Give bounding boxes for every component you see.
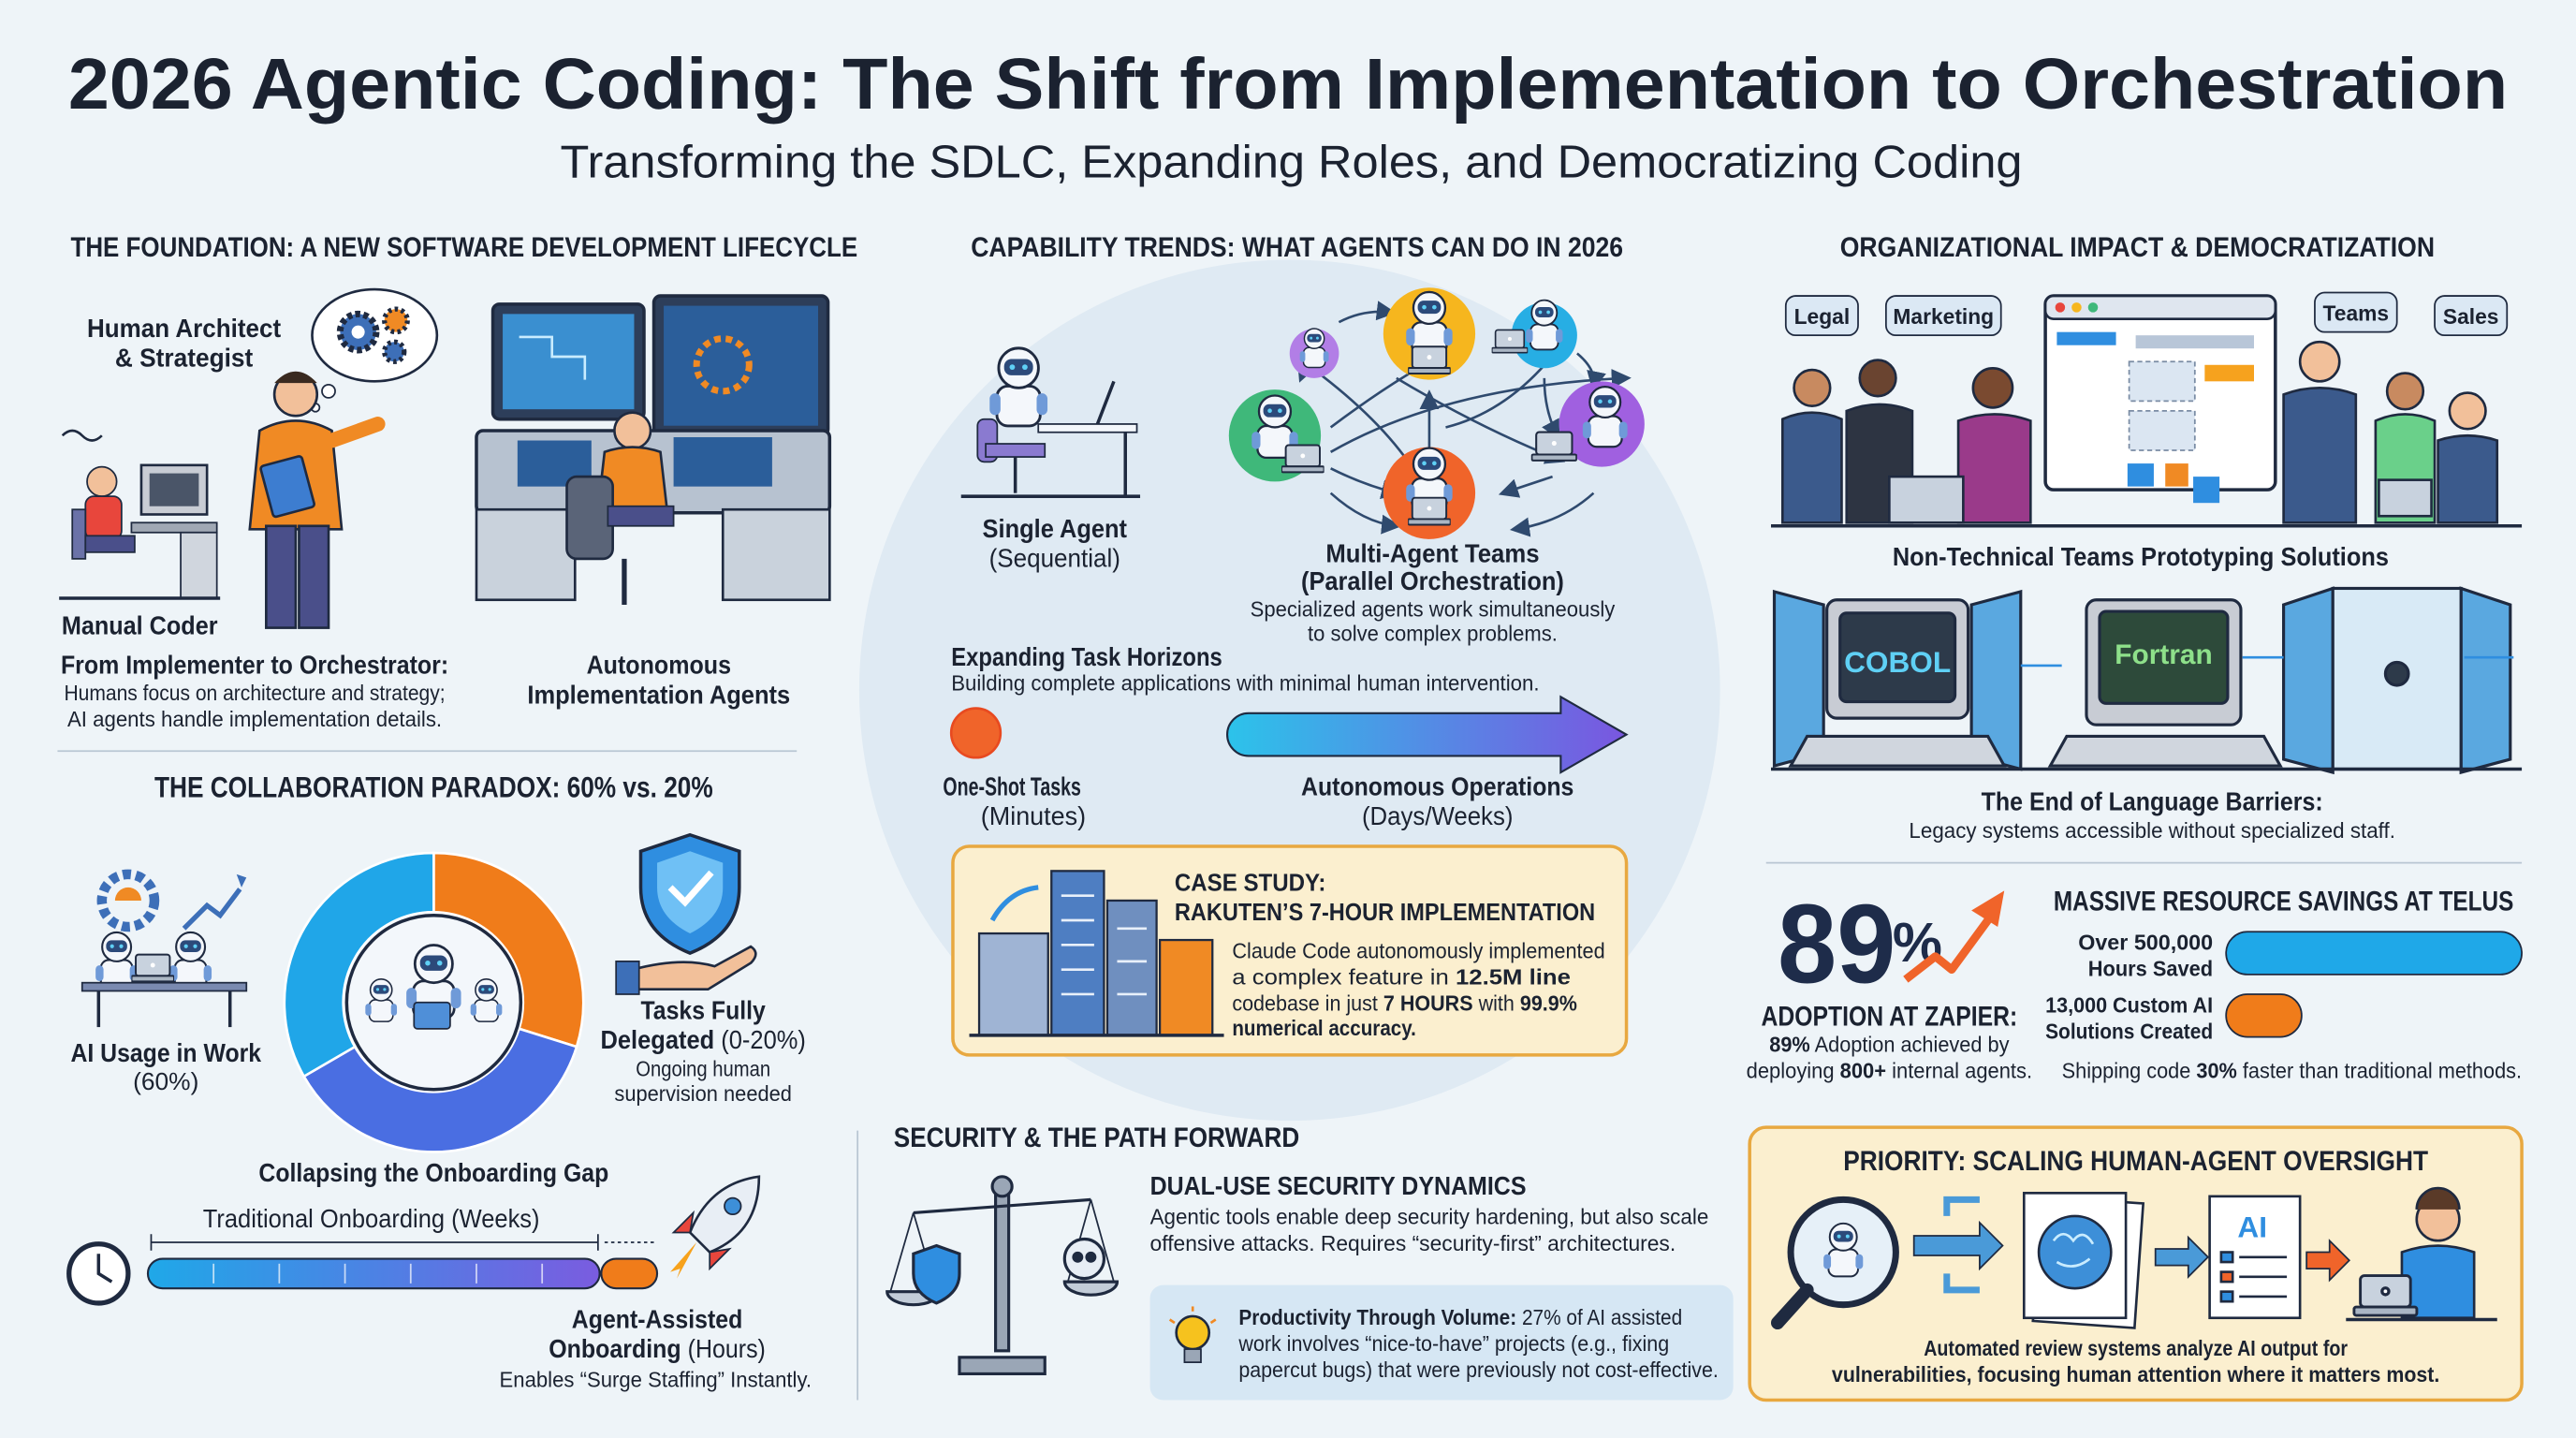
- stat: 89%: 89: [1778, 883, 1895, 1007]
- label: autonomous agents: Autonomous: [587, 651, 731, 680]
- label: multi-agent teams: [1251, 538, 1616, 646]
- label: multi-agent teams: Specialized agents work simultaneously: [1251, 596, 1616, 621]
- callout: Rakuten case study: codebase in just 7 HOURS with 99.9%: [1232, 991, 1577, 1016]
- label: one-shot tasks: [943, 772, 1086, 830]
- background circle: [859, 259, 1720, 1121]
- label: single agent: [983, 514, 1127, 573]
- chart: donut: [285, 853, 583, 1152]
- callout: Rakuten case study: CASE STUDY:: [1175, 868, 1325, 896]
- label: agent assisted: Enables “Surge Staffing” Instantly.: [500, 1367, 812, 1391]
- label: autonomous agents: Implementation Agents: [527, 680, 790, 709]
- panel: telus savings: [2045, 886, 2522, 1082]
- callout: Rakuten case study: numerical accuracy.: [1232, 1016, 1416, 1040]
- icon: document with brain: [2024, 1193, 2144, 1328]
- text: zapier: 89% Adoption achieved by: [1769, 1032, 2010, 1056]
- speech bubbles: [1786, 293, 2507, 335]
- heading: paradox: THE COLLABORATION PARADOX: 60% vs. 20%: [154, 770, 713, 803]
- illustration: autonomous workstation: [476, 296, 829, 605]
- callout: productivity through volume: Productivity Through Volume: 27% of AI assisted: [1238, 1305, 1682, 1329]
- label: multi-agent teams: Multi-Agent Teams: [1325, 538, 1540, 567]
- chart: onboarding bar: [148, 1234, 657, 1288]
- illustration: architect person: [250, 372, 378, 628]
- text: zapier: [1747, 1001, 2032, 1082]
- panel: capability trends: [859, 232, 1720, 1121]
- label: AI usage: AI Usage in Work: [70, 1038, 261, 1067]
- chart: savings bars: 13,000 Custom AI: [2045, 992, 2213, 1017]
- panel: priority oversight: [1749, 1127, 2522, 1400]
- label: AI usage: (60%): [133, 1067, 198, 1095]
- label: agent assisted: [500, 1304, 812, 1391]
- icon: AI document: AI: [2237, 1211, 2267, 1244]
- heading: capability: CAPABILITY TRENDS: WHAT AGENTS CAN DO IN 2026: [971, 232, 1623, 263]
- text: expanding task horizons: Expanding Task Horizons: [951, 642, 1222, 671]
- panel: security: [887, 1123, 1734, 1400]
- text: dual-use security: offensive attacks. Requires “security-first” architectures.: [1150, 1231, 1676, 1255]
- icon: buildings: [970, 871, 1224, 1035]
- icon: one-shot dot: [951, 709, 1001, 757]
- text: zapier: deploying 800+ internal agents.: [1747, 1058, 2032, 1082]
- text: priority caption: vulnerabilities, focusing human attention where it matters most.: [1832, 1362, 2439, 1387]
- text: dual-use security: [1150, 1171, 1708, 1255]
- label: autonomous operations: (Days/Weeks): [1362, 801, 1513, 830]
- arrows: review flow: [1914, 1199, 2349, 1290]
- callout: Rakuten case study: RAKUTEN’S 7-HOUR IMPLEMENTATION: [1175, 898, 1595, 926]
- label: non-technical teams: Non-Technical Teams Prototyping Solutions: [1893, 542, 2389, 571]
- label: human architect: [87, 314, 281, 373]
- label: tasks delegated: [600, 995, 806, 1106]
- label: autonomous operations: [1301, 772, 1573, 830]
- panel: collaboration paradox: [69, 770, 812, 1391]
- icon: balance scale: [887, 1177, 1117, 1373]
- callout: Rakuten case study: [953, 846, 1627, 1055]
- illustration: non-technical team with browser: [1771, 296, 2522, 526]
- icon: thought bubble gears: [312, 289, 437, 412]
- text: dual-use security: Agentic tools enable deep security hardening, but also scale: [1150, 1205, 1708, 1229]
- icon: lightbulb: [1170, 1306, 1216, 1362]
- text: priority caption: Automated review systems analyze AI output for: [1924, 1336, 2348, 1360]
- label: human architect: & Strategist: [115, 344, 253, 373]
- speech bubbles: Teams: [2323, 301, 2389, 325]
- label: manual coder: Manual Coder: [62, 611, 218, 640]
- label: autonomous operations: Autonomous Operations: [1301, 772, 1573, 801]
- text: end of language barriers: The End of Language Barriers:: [1982, 786, 2323, 815]
- chart: savings bars: Solutions Created: [2045, 1019, 2213, 1043]
- label: single agent: Single Agent: [983, 514, 1127, 543]
- callout: productivity through volume: work involves “nice-to-have” projects (e.g., fixing: [1237, 1331, 1669, 1356]
- icon: human reviewer: [2346, 1188, 2497, 1319]
- title: 2026 Agentic Coding: The Shift from Implementation to Orchestration: [68, 44, 2508, 125]
- label: traditional onboarding: Traditional Onboarding (Weeks): [203, 1204, 540, 1233]
- text: priority caption: [1832, 1336, 2439, 1387]
- text: expanding task horizons: [951, 642, 1540, 695]
- arrow: task horizon: [1227, 697, 1627, 772]
- icon: growth arrow: [1906, 920, 1988, 979]
- label: agent assisted: Onboarding (Hours): [549, 1334, 766, 1363]
- label: one-shot tasks: One-Shot Tasks: [943, 772, 1081, 801]
- illustration: manual coder: [59, 431, 220, 598]
- text: implementer to orchestrator: AI agents handle implementation details.: [67, 707, 442, 731]
- illustration: legacy computers: Fortran: [2115, 639, 2213, 670]
- callout: Rakuten case study: Claude Code autonomously implemented: [1232, 938, 1605, 962]
- heading: priority: PRIORITY: SCALING HUMAN-AGENT OVERSIGHT: [1843, 1146, 2428, 1177]
- chart: savings bars: Over 500,000: [2078, 931, 2213, 955]
- text: expanding task horizons: Building complete applications with minimal human intervention.: [951, 670, 1540, 695]
- icon: rocket: [670, 1177, 759, 1279]
- heading: organizational impact: ORGANIZATIONAL IMPACT & DEMOCRATIZATION: [1840, 232, 2435, 263]
- label: single agent: (Sequential): [989, 544, 1120, 573]
- label: tasks delegated: Delegated (0-20%): [600, 1025, 806, 1054]
- label: tasks delegated: Tasks Fully: [640, 995, 766, 1024]
- subtitle: Transforming the SDLC, Expanding Roles, and Democratizing Coding: [560, 138, 2023, 188]
- heading: foundation: THE FOUNDATION: A NEW SOFTWARE DEVELOPMENT LIFECYCLE: [70, 232, 857, 263]
- heading: onboarding gap: Collapsing the Onboarding Gap: [258, 1158, 608, 1187]
- icon: AI document: [2210, 1196, 2300, 1318]
- label: tasks delegated: supervision needed: [614, 1081, 792, 1106]
- text: end of language barriers: [1909, 786, 2395, 843]
- text: implementer to orchestrator: Humans focus on architecture and strategy;: [64, 681, 446, 705]
- callout: productivity through volume: [1150, 1285, 1734, 1400]
- callout: Rakuten case study: a complex feature in 12.5M line: [1232, 964, 1571, 989]
- label: autonomous agents: [527, 651, 790, 709]
- text: end of language barriers: Legacy systems accessible without specialized staff.: [1909, 818, 2395, 843]
- label: agent assisted: Agent-Assisted: [572, 1304, 742, 1333]
- panel: zapier adoption: [1747, 883, 2032, 1082]
- icon: magnifier with robot: [1778, 1199, 1895, 1323]
- illustration: single agent: [961, 348, 1140, 496]
- panel: foundation: [59, 232, 857, 731]
- label: one-shot tasks: (Minutes): [981, 801, 1086, 830]
- text: implementer to orchestrator: [61, 651, 448, 731]
- icon: clock: [69, 1244, 128, 1303]
- chart: savings bars: Hours Saved: [2088, 957, 2213, 981]
- label: tasks delegated: Ongoing human: [636, 1057, 770, 1081]
- icon: AI usage robots: [82, 874, 246, 1027]
- label: multi-agent teams: (Parallel Orchestration): [1301, 566, 1564, 595]
- chart: savings bars: [2045, 931, 2522, 1043]
- panel: organizational impact: [1771, 232, 2522, 843]
- label: multi-agent teams: to solve complex problems.: [1308, 622, 1558, 646]
- speech bubbles: Legal: [1794, 304, 1850, 329]
- people: [1782, 342, 2497, 522]
- icon: shield with hand: [616, 835, 755, 994]
- speech bubbles: Sales: [2443, 304, 2498, 329]
- illustration: legacy computers: [1771, 588, 2522, 772]
- callout: productivity through volume: papercut bugs) that were previously not cost-effective.: [1238, 1357, 1719, 1382]
- text: zapier: ADOPTION AT ZAPIER:: [1761, 1001, 2017, 1032]
- illustration: multi-agent network: [1229, 287, 1645, 539]
- text: implementer to orchestrator: From Implementer to Orchestrator:: [61, 651, 448, 680]
- illustration: legacy computers: COBOL: [1844, 645, 1951, 679]
- text: dual-use security: DUAL-USE SECURITY DYNAMICS: [1150, 1171, 1526, 1200]
- text: shipping faster: Shipping code 30% faster than traditional methods.: [2062, 1058, 2522, 1082]
- label: human architect: Human Architect: [87, 314, 281, 343]
- label: AI usage: [70, 1038, 261, 1095]
- heading: security: SECURITY & THE PATH FORWARD: [894, 1123, 1299, 1153]
- speech bubbles: Marketing: [1893, 304, 1994, 329]
- panel: zapier adoption: %: [1893, 911, 1942, 974]
